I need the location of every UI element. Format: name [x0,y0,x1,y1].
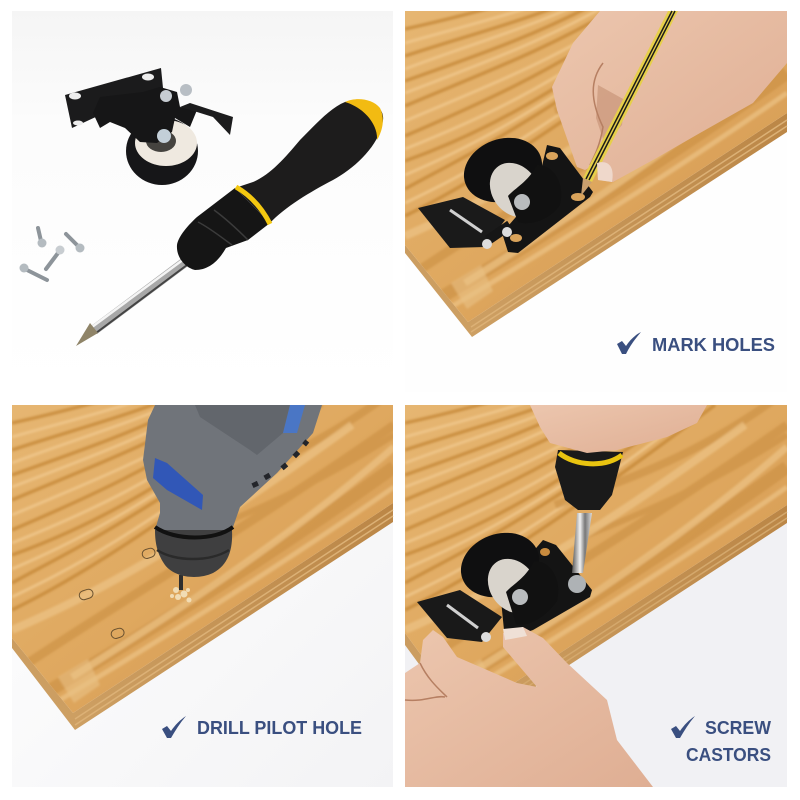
label: mark holes: MARK HOLES [652,334,775,355]
plywood board [405,405,788,687]
drill [143,405,322,590]
castor on board [417,522,592,642]
panel: tools and parts [12,11,393,391]
panel: mark holes [405,10,788,354]
sawdust [170,587,192,602]
screwdriver [76,99,383,346]
pencil marks [78,547,156,640]
plywood board [12,390,394,730]
label: castors: CASTORS [686,744,771,765]
plywood board [405,0,787,337]
castor [65,68,233,185]
label: drill pilot hole: DRILL PILOT HOLE [197,717,362,738]
screwdriver [555,450,623,573]
check icon [671,716,695,738]
check icon [162,716,186,738]
upper hand [530,405,707,453]
castor on board [418,127,593,253]
panel: drill pilot hole [12,390,394,787]
screws [20,228,84,280]
check icon [617,332,641,354]
hand with pencil [552,11,787,196]
label: screw castors: SCREW [705,717,772,738]
lower hand [405,627,653,787]
panel: screw castors [405,390,787,787]
